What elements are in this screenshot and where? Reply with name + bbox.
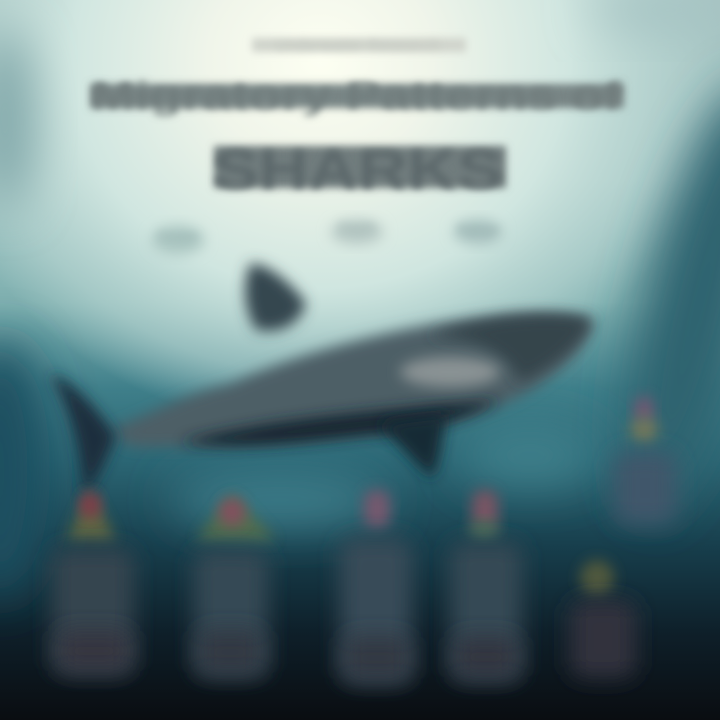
- three small captions: Ocean: [156, 227, 198, 243]
- title line one: Migratory Patterns of: [91, 75, 622, 116]
- illustration: small shark fin: [245, 264, 306, 331]
- three small captions: Depth: [338, 219, 376, 235]
- text panel: [52, 548, 134, 673]
- icon: [472, 490, 498, 530]
- text panel: [340, 538, 412, 682]
- icon: [66, 490, 116, 540]
- icon: [580, 560, 614, 596]
- icon: [634, 396, 654, 424]
- illustration: great shark: [50, 313, 594, 496]
- title line two: SHARKS: [213, 140, 503, 200]
- text panel: [570, 600, 636, 678]
- header: blurred title block: [90, 37, 624, 254]
- icon: [196, 494, 276, 540]
- three small captions: Range: [457, 221, 499, 237]
- column 2: [194, 494, 276, 676]
- subtitle line: Underwater Research: [276, 37, 440, 54]
- column 6: [614, 396, 676, 524]
- text panel: [614, 452, 676, 524]
- shark light belly patch: [400, 357, 500, 387]
- column 5: [570, 560, 636, 678]
- text panel: [450, 542, 522, 680]
- text panel: [194, 550, 268, 676]
- column 3: [340, 490, 412, 682]
- shark body: [110, 313, 594, 446]
- column 1: [52, 490, 134, 673]
- three small captions: [152, 219, 502, 254]
- icon: [364, 490, 390, 528]
- column 4: [450, 490, 522, 680]
- shark upper head shade: [430, 316, 590, 382]
- shark belly shade: [180, 400, 500, 446]
- shark tail: [50, 374, 116, 496]
- title line one: [90, 75, 624, 116]
- shark pectoral fin: [380, 414, 446, 478]
